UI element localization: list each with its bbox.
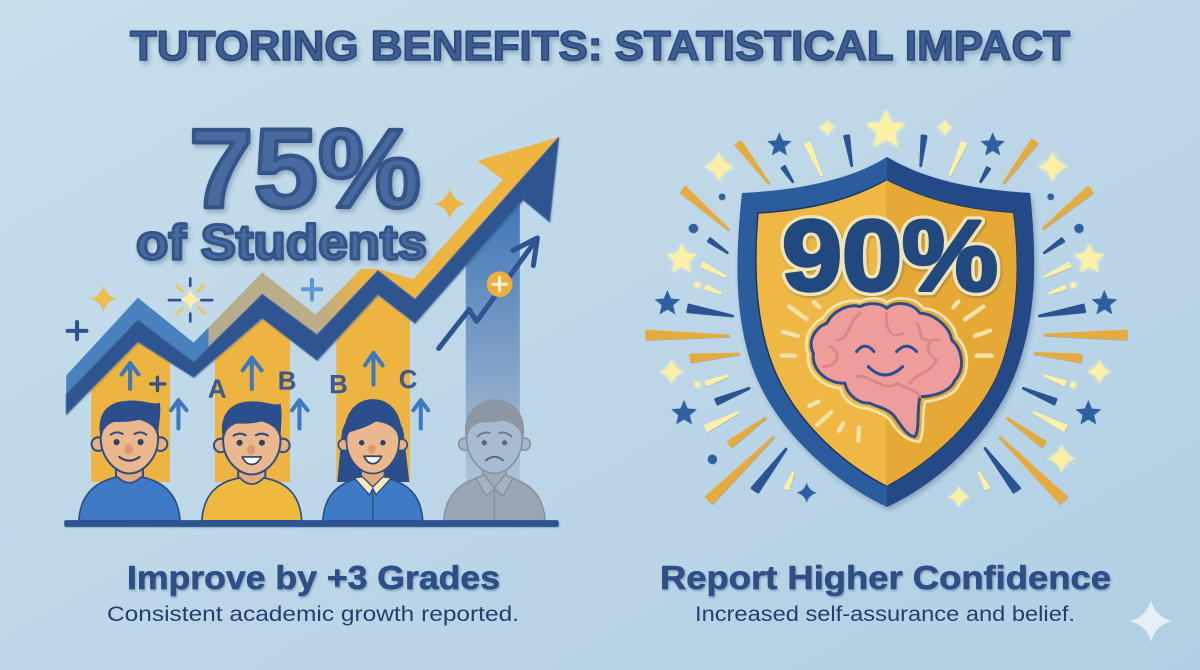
90 percent number: 90% [782, 200, 998, 312]
bar 1 [91, 342, 170, 482]
plus navy [68, 322, 87, 339]
caption text right: Increased self-assurance and belief. [695, 603, 1075, 626]
caption heading right: Report Higher Confidence [660, 559, 1111, 596]
shield yellow face [756, 180, 1017, 486]
grade letters: B [278, 368, 296, 396]
confidence ticks around brain [782, 302, 992, 441]
sun burst [169, 278, 212, 321]
plus small on bar [151, 377, 165, 391]
plus badge [487, 271, 512, 297]
panel: 75 percent students chart [64, 106, 559, 527]
shield rim right half [887, 157, 1034, 507]
student 3 [323, 399, 423, 521]
grade letters [208, 366, 417, 403]
brain folds [823, 313, 938, 397]
brain cream edge [806, 298, 967, 442]
90 percent number: 90% [782, 200, 998, 312]
brain outline and fill [811, 304, 962, 437]
bar 3 [336, 294, 410, 482]
shield face right half [886, 180, 1017, 486]
plus blue [303, 280, 321, 299]
small rising arrow [439, 238, 537, 348]
radiating rays [647, 136, 1126, 503]
student 1 [79, 401, 180, 521]
title: TUTORING BENEFITS: STATISTICAL IMPACT [130, 22, 1070, 69]
bar 4 [466, 203, 520, 482]
shelf [64, 520, 559, 527]
shield [737, 157, 1034, 507]
of students label: of Students [136, 216, 427, 270]
75 percent number: 75% [189, 106, 421, 231]
upper band of trend arrow [66, 137, 559, 397]
student 4 grey [444, 399, 545, 521]
shield outer rim [737, 157, 1034, 507]
bar 2 [215, 318, 290, 482]
grade letters: C [399, 366, 417, 394]
smiling brain [806, 298, 967, 442]
caption heading left: Improve by +3 Grades [127, 559, 500, 596]
student 2 [202, 401, 302, 521]
sparkle yellow left [90, 285, 117, 312]
dark trend arrow [66, 137, 559, 414]
sparkle yellow right [434, 188, 465, 219]
panel: 90 percent confidence shield [647, 109, 1126, 508]
caption text left: Consistent academic growth reported. [107, 603, 519, 626]
grade letters: A [208, 375, 226, 403]
blue up arrows [122, 353, 428, 429]
brain face [857, 346, 917, 375]
corner sparkle [1130, 600, 1172, 642]
grade letters: B [329, 371, 348, 399]
rising grade chart illustration [64, 137, 559, 527]
stars and sparkles [655, 109, 1117, 508]
